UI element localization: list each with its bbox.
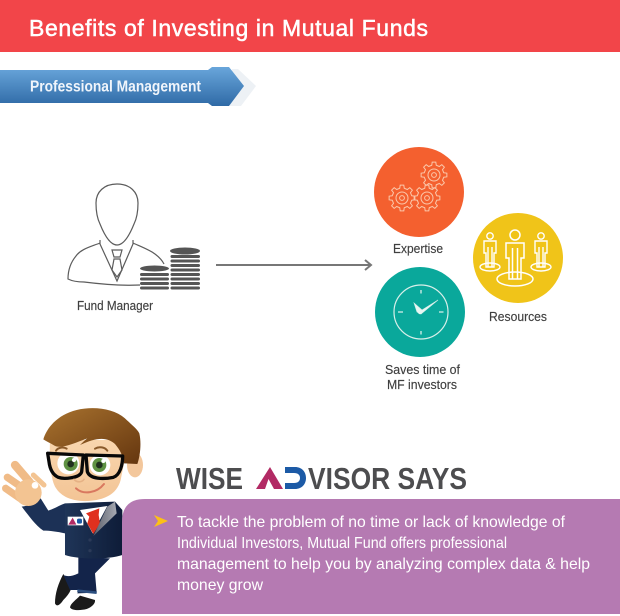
circle: expertise (374, 147, 464, 237)
icon: people on discs (480, 230, 551, 286)
badge (68, 517, 83, 525)
title: Benefits of Investing in Mutual Funds (29, 15, 428, 41)
nose (74, 479, 84, 482)
ribbon label: Professional Management (30, 78, 202, 96)
label: saves time of MF investors: Saves time of (385, 363, 461, 377)
callout text: Individual Investors, Mutual Fund offers professional (177, 535, 507, 552)
heading: VISOR SAYS (308, 461, 467, 496)
logo mark A (256, 467, 283, 489)
manager outline (68, 184, 164, 285)
necktie (86, 508, 100, 534)
callout text: management to help you by analyzing complex data & help (177, 556, 590, 573)
arrow (216, 260, 371, 270)
icon: fund manager with coins (68, 184, 200, 290)
shirt (80, 506, 107, 533)
near shoe (70, 596, 95, 610)
arm (22, 498, 65, 533)
ear (127, 453, 143, 477)
eyebrows (56, 447, 107, 451)
section ribbon: professional management (0, 67, 256, 106)
callout text (177, 514, 590, 594)
jacket (65, 502, 122, 559)
character: wise advisor (6, 408, 143, 610)
heading: WISE (176, 461, 243, 496)
label: resources: Resources (489, 310, 547, 324)
purple callout (122, 499, 620, 614)
far shoe (55, 574, 71, 605)
callout text: To tackle the problem of no time or lack of knowledge of (177, 514, 566, 531)
label: fund manager: Fund Manager (77, 299, 153, 313)
glasses (48, 452, 123, 478)
label: expertise: Expertise (393, 242, 443, 256)
panel: wise advisor says (122, 461, 620, 614)
face (50, 440, 124, 501)
hair (43, 408, 140, 464)
heading (176, 461, 467, 496)
hand (6, 465, 44, 506)
callout text: money grow (177, 577, 263, 594)
trouser cuff (77, 591, 97, 593)
header banner (0, 0, 620, 52)
legs (63, 557, 110, 593)
circle: saves time (375, 267, 465, 357)
bullet arrow (154, 515, 168, 527)
jacket buttons (88, 538, 92, 552)
label: saves time of MF investors (385, 363, 461, 392)
smile (76, 484, 104, 492)
lapel (93, 502, 117, 536)
coin stacks (140, 248, 200, 290)
icon: gears (389, 162, 447, 211)
circle: resources (473, 213, 563, 303)
icon: clock (394, 285, 448, 339)
logo mark D (285, 467, 306, 489)
label: saves time of MF investors: MF investors (387, 378, 457, 392)
